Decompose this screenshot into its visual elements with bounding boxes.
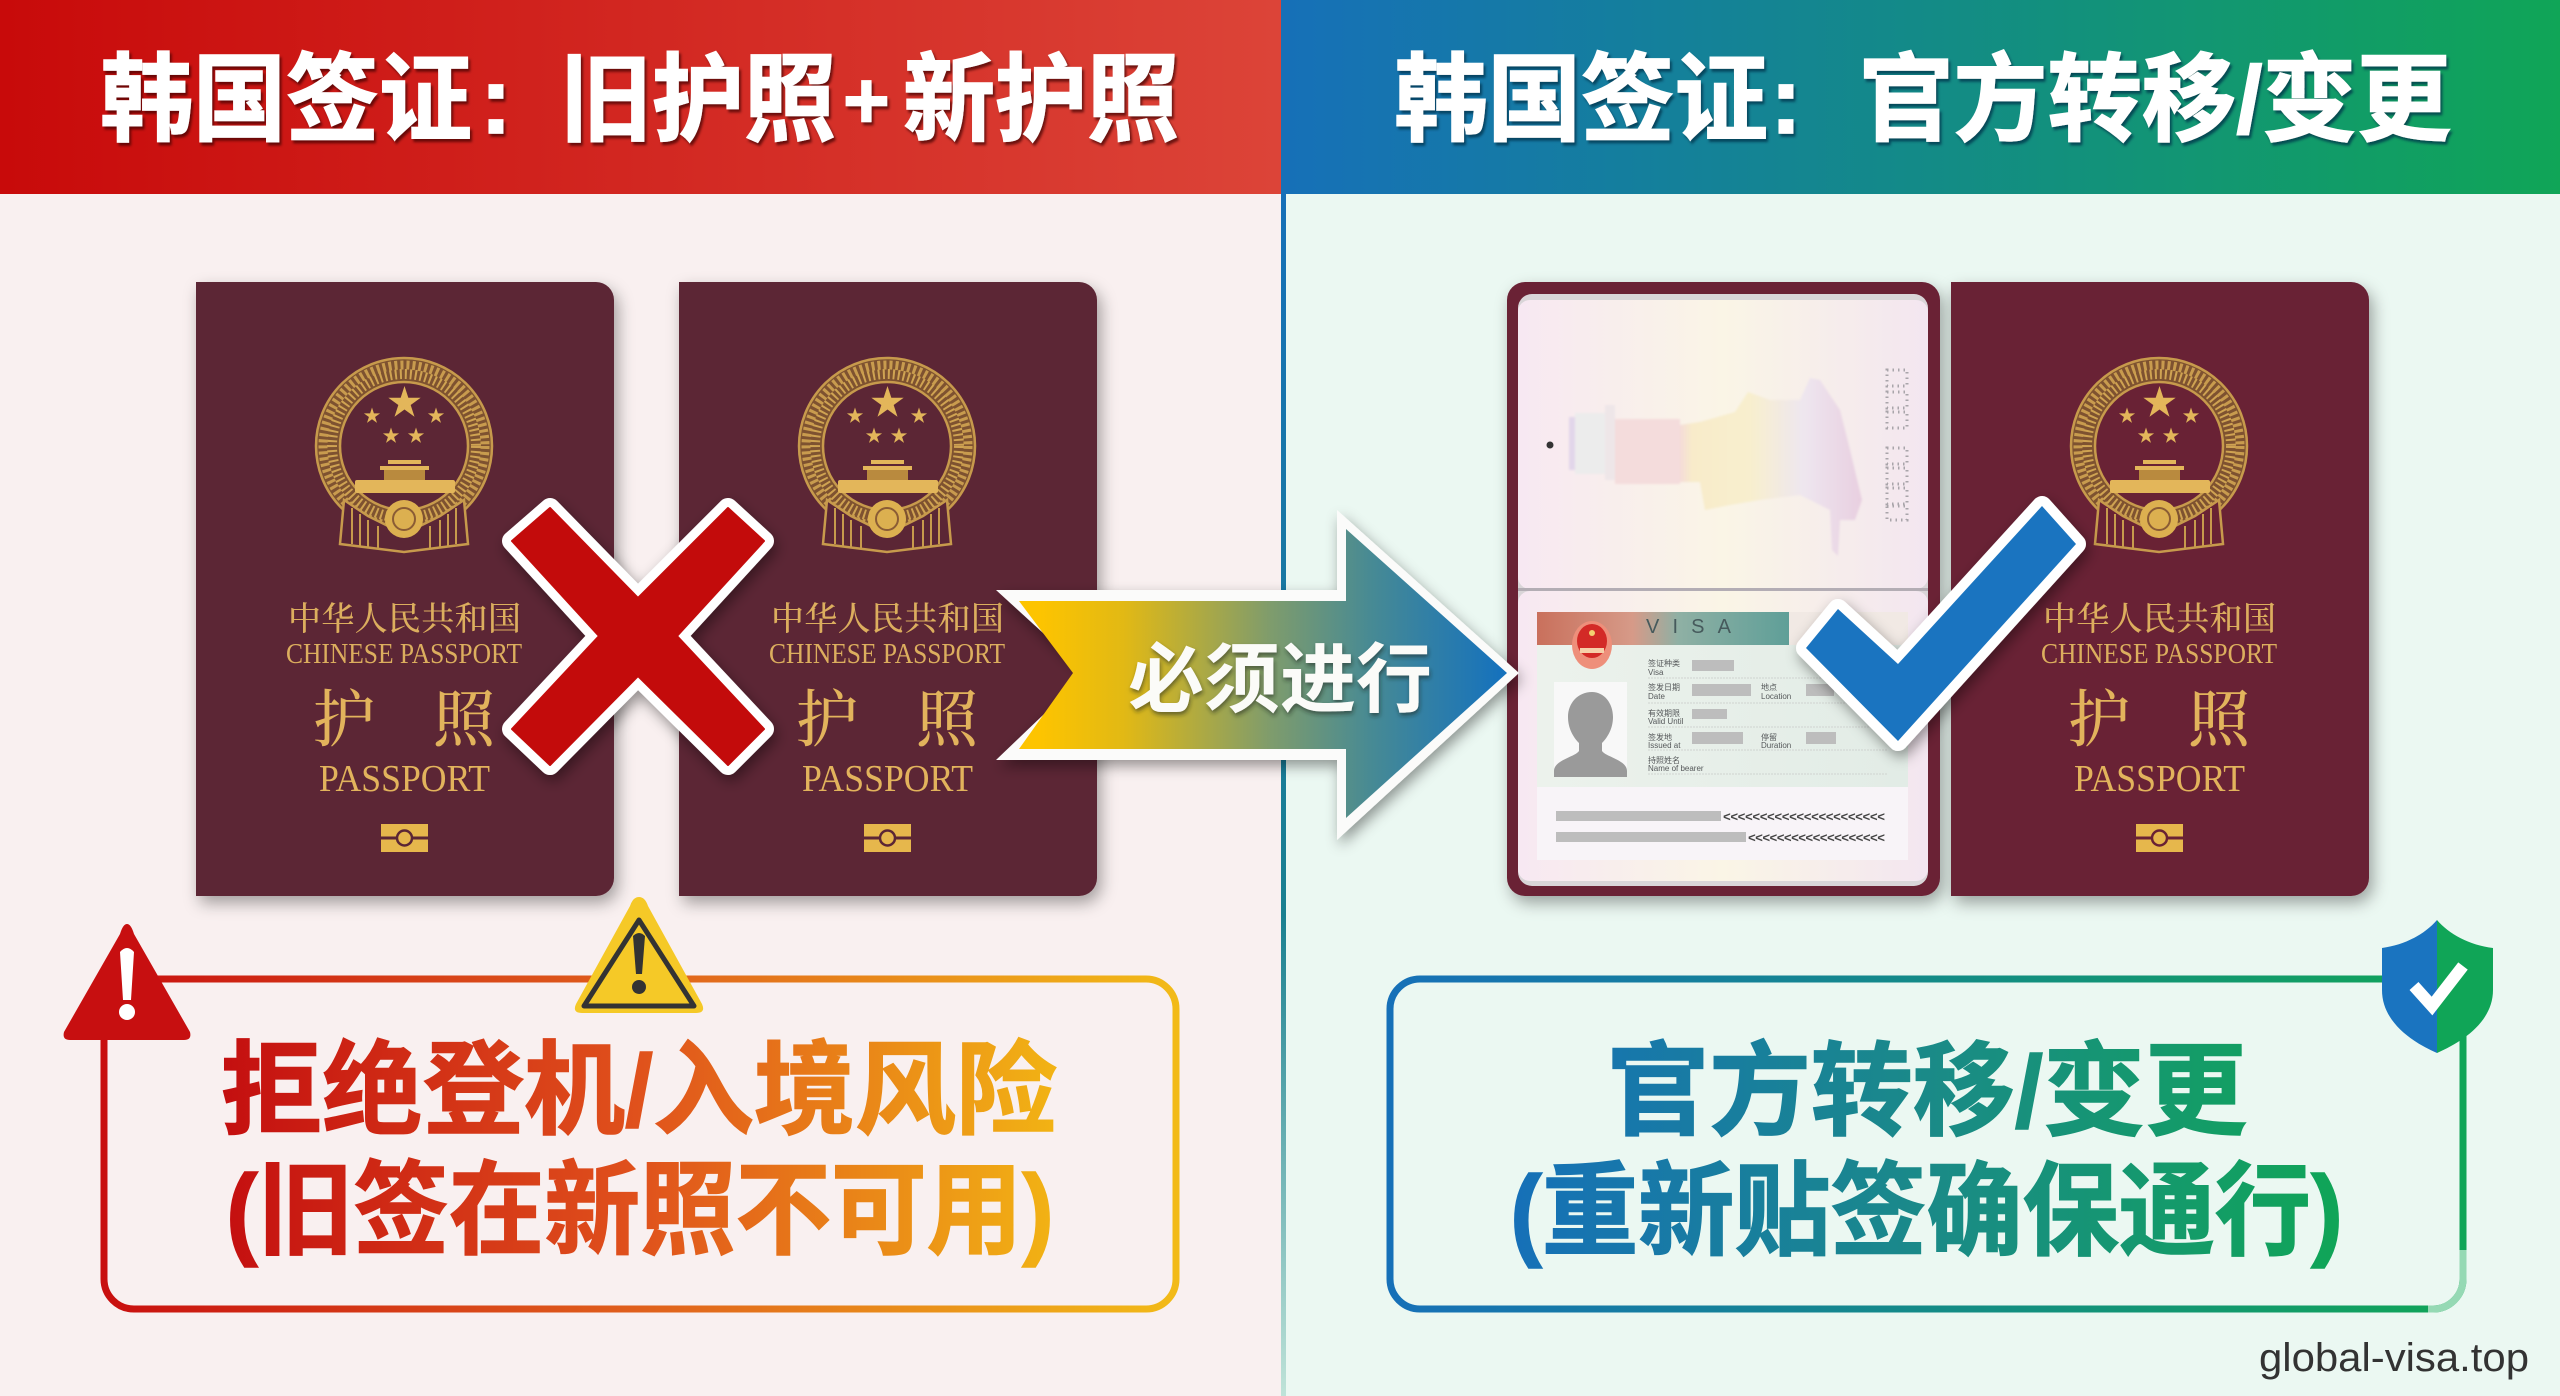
header: right banner: : — [1770, 47, 1802, 154]
perforated number — [1887, 370, 1907, 520]
passport text: 照 — [2188, 687, 2252, 755]
passport text: 护 — [313, 687, 375, 755]
visa field labels: Location — [1761, 692, 1791, 701]
lower passport page — [1518, 591, 1928, 881]
fade on corner — [2428, 1250, 2463, 1309]
visa field labels: 停留 — [1761, 732, 1777, 742]
visa field labels: 签发地 — [1648, 732, 1672, 742]
visa field labels: 签证种类 — [1648, 658, 1680, 668]
visa emblem — [1572, 621, 1612, 669]
header: left banner: 韩国签证 — [100, 47, 472, 154]
passport text — [769, 601, 1005, 800]
visa sticker — [1537, 612, 1908, 860]
arrow label: 必须进行 — [1128, 638, 1432, 723]
visa field labels: 有效期限 — [1648, 708, 1680, 718]
header: left banner: 新护照 — [903, 47, 1179, 154]
visa field labels — [1648, 658, 1791, 773]
callout text: risk: 拒绝登机/入境风险 — [221, 1034, 1057, 1148]
visa heading: VISA — [1646, 616, 1732, 638]
icon: national emblem — [799, 358, 975, 552]
passport text: 护 — [796, 687, 858, 755]
callout: risk box — [64, 897, 1176, 1309]
passport cover: right passport — [1951, 282, 2369, 896]
callout text: transfer: (重新贴签确保通行) — [1510, 1155, 2343, 1269]
header: right banner: 官方转移/变更 — [1859, 47, 2451, 154]
passport text: 照 — [433, 687, 497, 755]
callout: official transfer box — [1390, 920, 2493, 1309]
photo — [1554, 682, 1627, 777]
passport text — [2041, 601, 2277, 800]
icon: shield check — [2382, 920, 2493, 1053]
visa field labels: Issued at — [1648, 741, 1681, 750]
page watermark — [1569, 378, 1862, 556]
upper passport page — [1518, 300, 1928, 589]
icon: yellow warning triangle — [575, 897, 703, 1013]
panel: left background — [0, 0, 1281, 1396]
header: left banner: 旧护照 — [560, 47, 836, 154]
passport text: PASSPORT — [802, 758, 973, 800]
machine readable zone — [1556, 810, 1885, 846]
icon: red cross mark — [512, 508, 764, 765]
machine readable zone: <<<<<<<<<<<<<<<<<<< — [1748, 831, 1885, 846]
icon: e-passport chip — [381, 824, 428, 852]
icon: e-passport chip — [2136, 824, 2183, 852]
callout text: transfer: 官方转移/变更 — [1607, 1035, 2247, 1149]
icon: red warning triangle — [64, 924, 190, 1040]
icon: national emblem — [316, 358, 492, 552]
passport text: 照 — [916, 687, 980, 755]
header: left banner: + — [843, 56, 890, 145]
visa field labels: 持照姓名 — [1648, 755, 1680, 765]
header: left banner: : — [480, 47, 512, 154]
visa field labels: Duration — [1761, 741, 1791, 750]
passport text: 护 — [2068, 687, 2130, 755]
visa field labels: Valid Until — [1648, 717, 1684, 726]
visa field labels: Visa — [1648, 668, 1664, 677]
callout text: risk: (旧签在新照不可用) — [226, 1154, 1054, 1268]
watermark: global-visa.top — [2259, 1336, 2529, 1380]
visa field labels: 签发日期 — [1648, 682, 1680, 692]
icon: blue check mark — [1806, 506, 2076, 741]
header: left banner — [0, 0, 1281, 194]
passport cover: old passport — [196, 282, 614, 896]
header: right banner: 韩国签证 — [1394, 47, 1768, 154]
passport text: 中华人民共和国 — [288, 601, 521, 638]
divider line — [1281, 194, 1286, 1396]
passport text: 中华人民共和国 — [771, 601, 1004, 638]
visa field labels: 地点 — [1761, 682, 1777, 692]
arrow: must proceed — [996, 510, 1519, 840]
visa field labels: Date — [1648, 692, 1665, 701]
panel: right background — [1281, 0, 2560, 1396]
passport cover: new passport — [679, 282, 1097, 896]
visa field labels: Name of bearer — [1648, 764, 1704, 773]
machine readable zone: <<<<<<<<<<<<<<<<<<<<<< — [1723, 810, 1885, 825]
icon: e-passport chip — [864, 824, 911, 852]
passport text: CHINESE PASSPORT — [769, 639, 1005, 670]
visa field bars — [1692, 660, 1836, 744]
passport text: CHINESE PASSPORT — [2041, 639, 2277, 670]
passport text: CHINESE PASSPORT — [286, 639, 522, 670]
fold — [1518, 588, 1928, 591]
callout text: risk — [221, 1034, 1057, 1268]
open passport with visa page — [1507, 282, 1940, 896]
passport text — [286, 601, 522, 800]
callout text: transfer — [1510, 1035, 2343, 1269]
hole — [1546, 442, 1554, 448]
icon: national emblem — [2071, 358, 2247, 552]
passport text: PASSPORT — [319, 758, 490, 800]
passport text: PASSPORT — [2074, 758, 2245, 800]
passport text: 中华人民共和国 — [2043, 601, 2276, 638]
header: right banner — [1281, 0, 2560, 194]
